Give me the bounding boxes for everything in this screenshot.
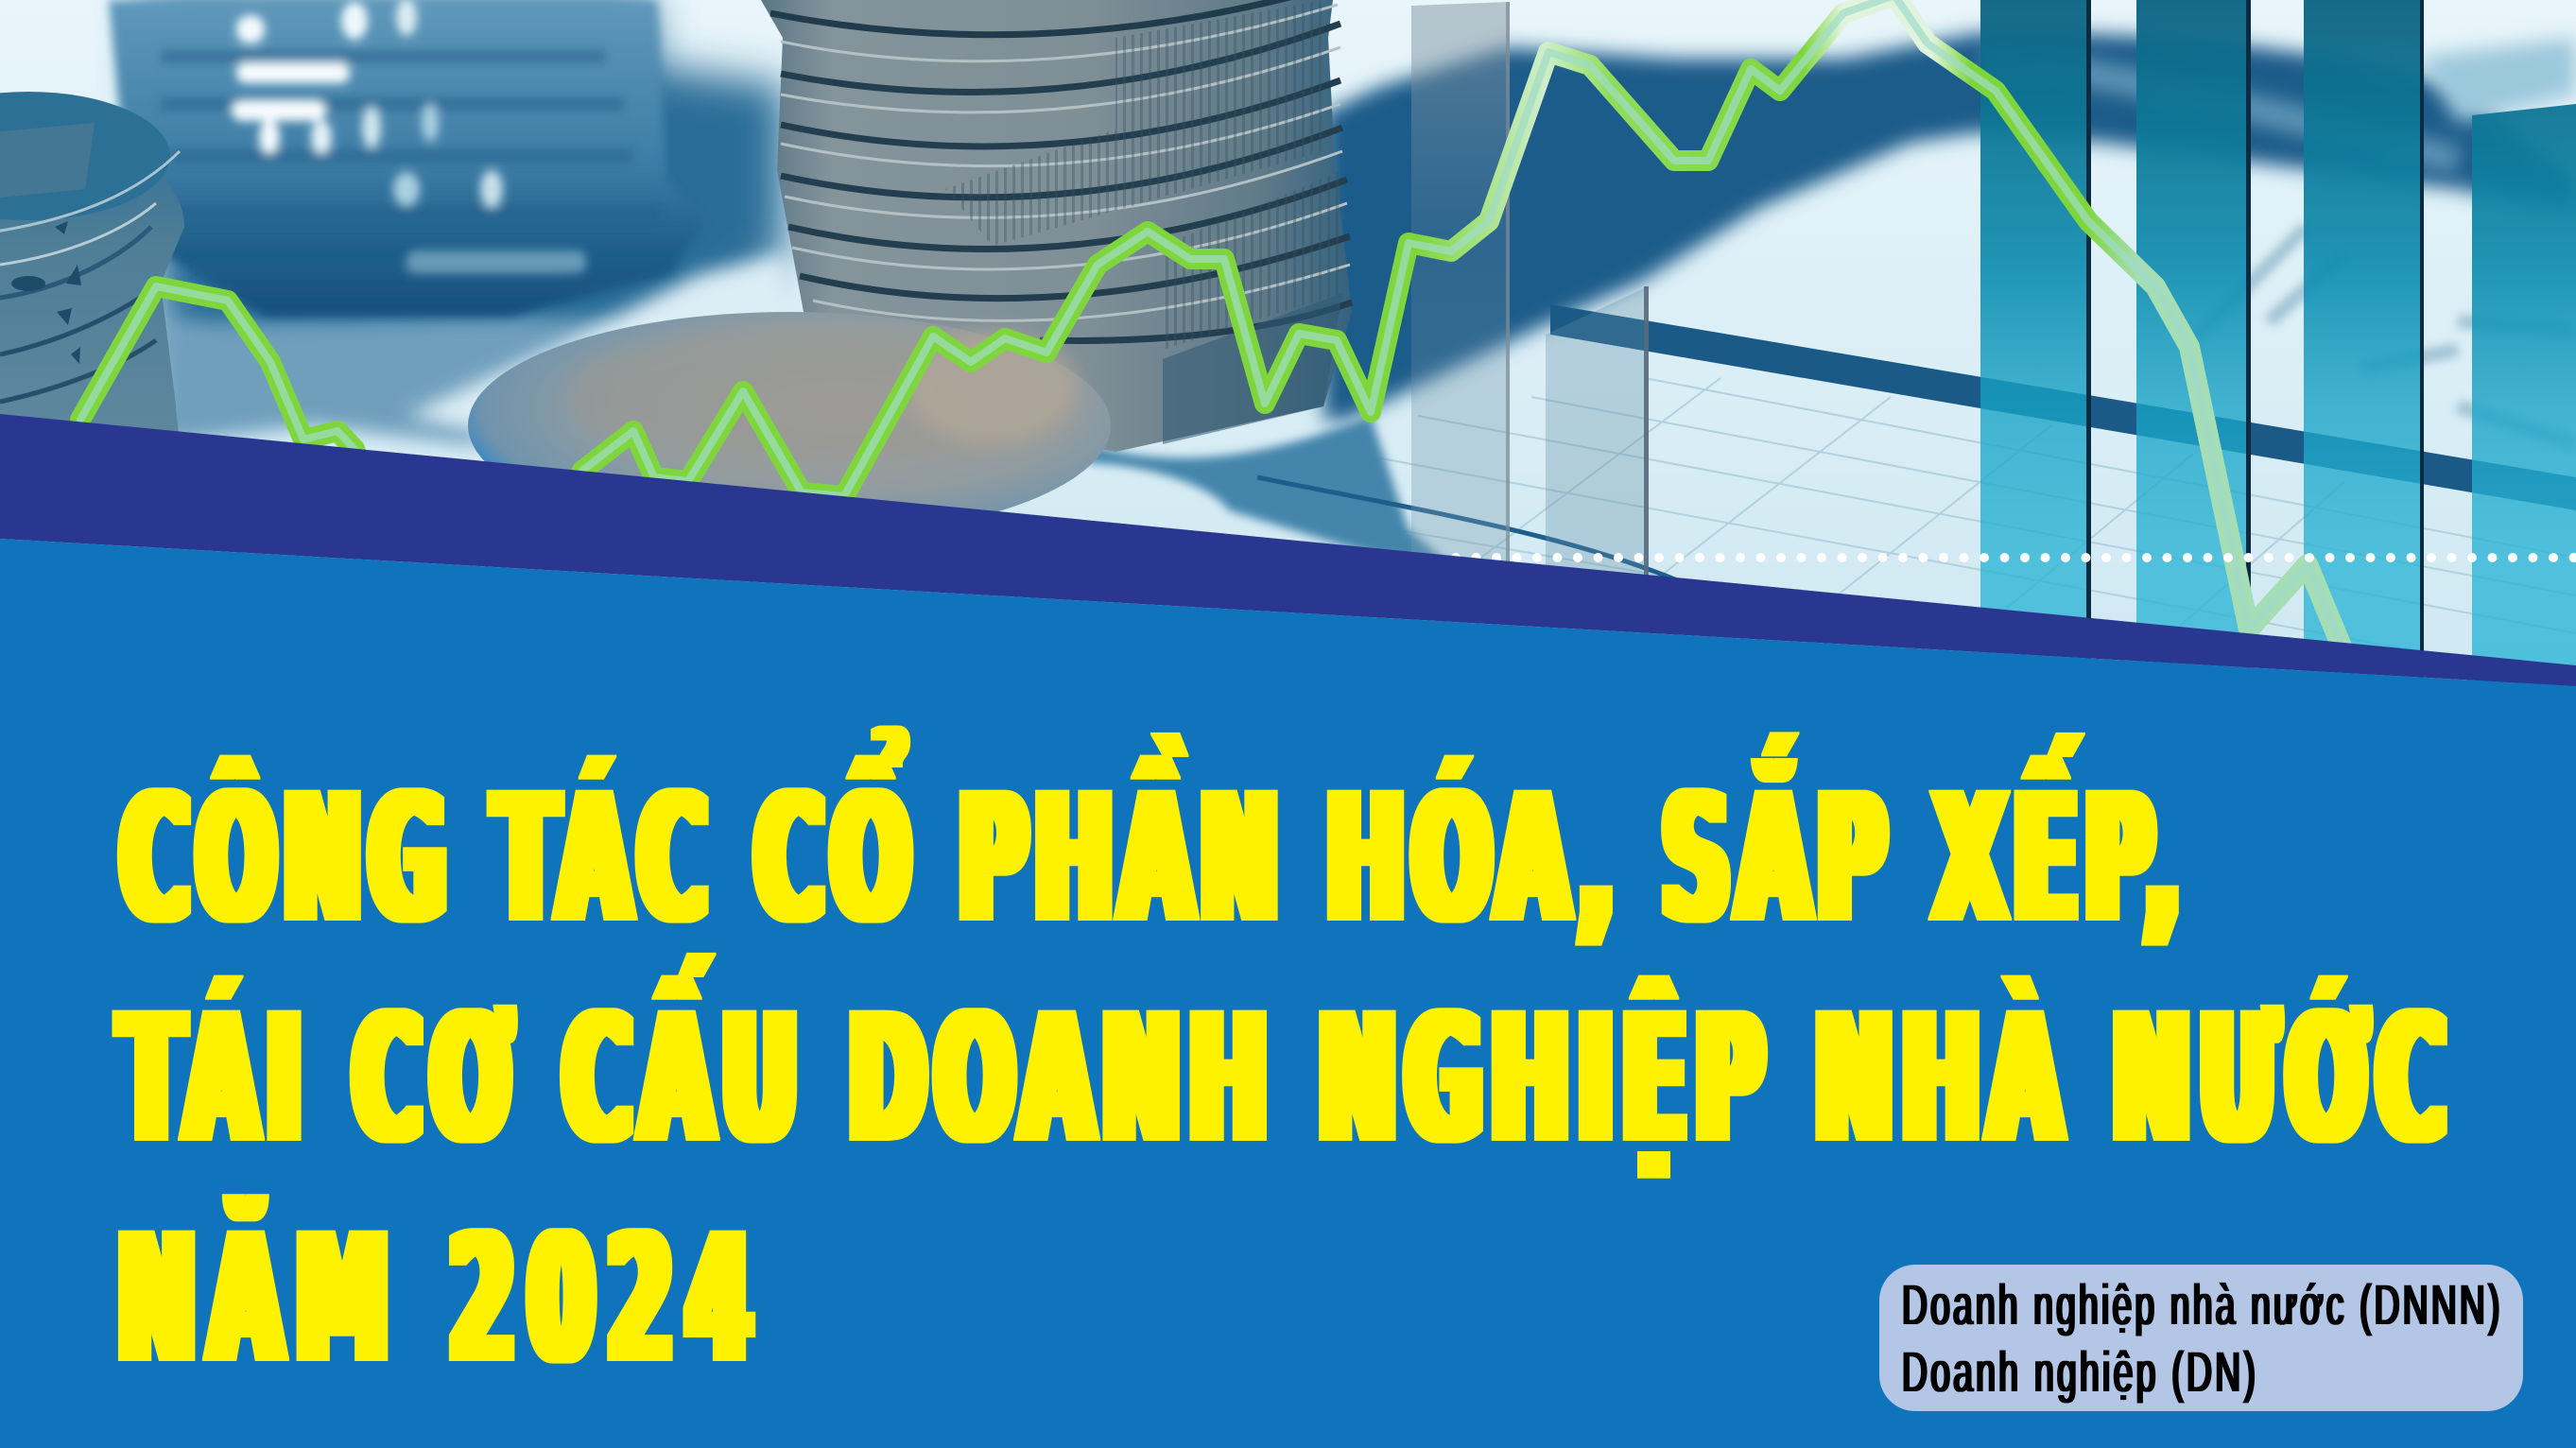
front coin — [468, 312, 1111, 539]
photo background: paper — [0, 0, 2576, 681]
floor left — [161, 317, 624, 444]
blue main panel — [0, 539, 2576, 1448]
blurred coin stack — [109, 0, 704, 317]
in-focus coin stack left — [0, 92, 184, 444]
legend text: Doanh nghiệp nhà nước (DNNN) — [1902, 1273, 2499, 1336]
translucent grey bars — [1411, 2, 1510, 605]
in-focus coin stack centre — [761, 0, 1352, 452]
photo: coins and financial chart — [0, 0, 2576, 681]
dark shadow bowl — [1323, 32, 2576, 421]
legend text — [1902, 1273, 2499, 1404]
paper grid — [1229, 378, 2576, 681]
blurred stack shadow — [142, 0, 785, 416]
title: TÁI CƠ CẤU DOANH NGHIỆP NHÀ NƯỚC — [120, 953, 2445, 1182]
chart bars — [1411, 0, 2576, 681]
legend box — [1879, 1265, 2523, 1411]
teal bars — [1980, 0, 2086, 681]
title — [118, 726, 2445, 1403]
navy diagonal band — [0, 414, 2576, 686]
diagonal dark stripe — [1550, 304, 2576, 510]
top right pale paper marks — [1985, 57, 2458, 161]
white dotted line — [1456, 553, 2576, 562]
green trend line — [80, 0, 2342, 646]
black bar rules — [2086, 0, 2091, 681]
legend text: Doanh nghiệp (DN) — [1902, 1340, 2256, 1404]
lower shadow under stack — [1087, 416, 1475, 586]
title: CÔNG TÁC CỔ PHẦN HÓA, SẮP XẾP, — [121, 726, 2180, 962]
title: NĂM 2024 — [118, 1195, 752, 1403]
